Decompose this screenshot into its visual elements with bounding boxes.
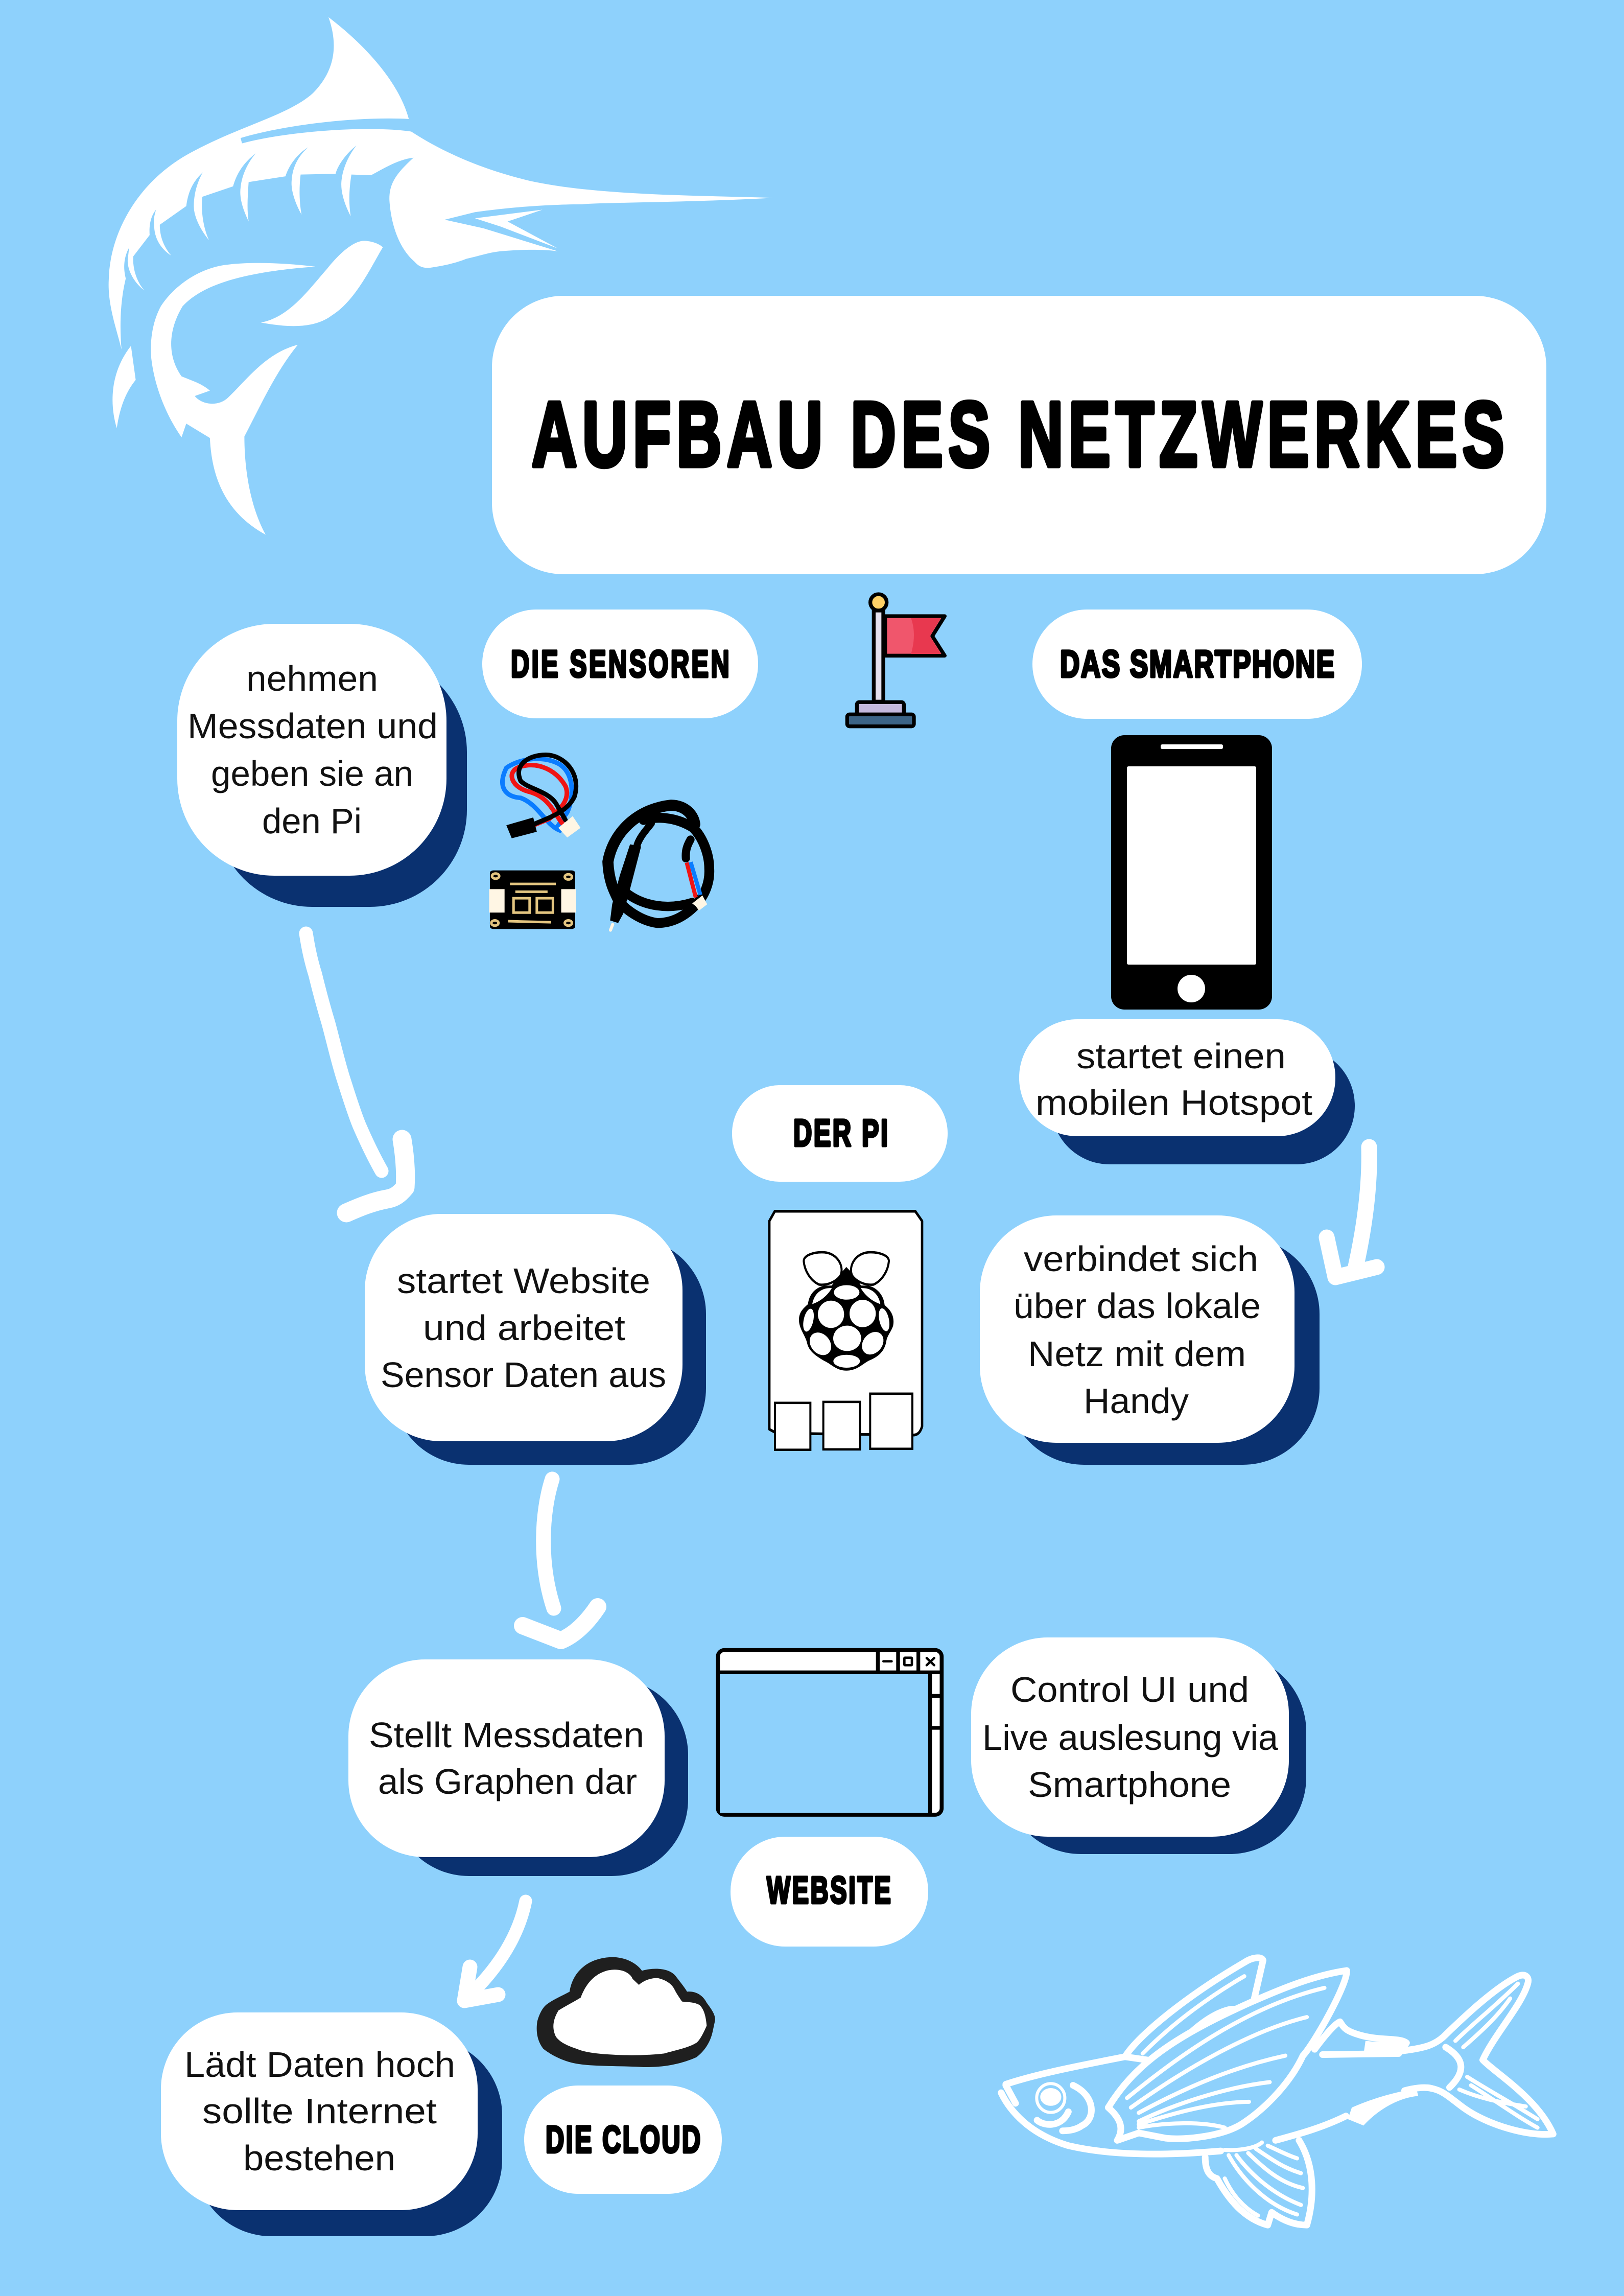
text: sensor description: geben sie an xyxy=(211,754,413,793)
text: graphs description: Stellt Messdaten xyxy=(369,1715,644,1755)
text: network connection description: Netz mit dem xyxy=(1028,1334,1246,1374)
text: network connection description: Handy xyxy=(1084,1381,1189,1421)
icon: marlin fish xyxy=(109,17,773,535)
icon: raspberry logo xyxy=(799,1252,893,1371)
text: hotspot description: startet einen xyxy=(1076,1036,1286,1076)
text: sensor description: nehmen xyxy=(246,659,378,698)
text: upload description: sollte Internet xyxy=(202,2091,437,2131)
label: das Smartphone: DAS SMARTPHONE xyxy=(1060,643,1334,685)
label: die Sensoren: DIE SENSOREN xyxy=(511,644,729,685)
label: die Cloud xyxy=(524,2086,722,2194)
text: hotspot description: mobilen Hotspot xyxy=(1035,1083,1312,1122)
panel: Pi website description xyxy=(365,1214,706,1465)
label: die Sensoren xyxy=(482,610,758,718)
icon: website window xyxy=(718,1650,942,1815)
text: graphs description: als Graphen dar xyxy=(378,1762,637,1801)
panel: graphs description xyxy=(348,1659,688,1876)
panel: upload description xyxy=(161,2012,502,2236)
text: network connection description: über das lokale xyxy=(1014,1286,1261,1326)
arrow: sensors to Pi xyxy=(306,933,406,1213)
text: sensor description: Messdaten und xyxy=(187,706,438,746)
label: Website xyxy=(731,1837,928,1947)
text: Pi website description: und arbeitet xyxy=(423,1308,625,1348)
text: Pi website description: startet Website xyxy=(397,1261,650,1301)
icon: sensor board xyxy=(489,871,576,929)
arrow: Pi to graphs xyxy=(523,1479,598,1641)
text: upload description: bestehen xyxy=(243,2138,395,2178)
text: Pi website description: Sensor Daten aus xyxy=(381,1355,666,1395)
text: network connection description: verbindet sich xyxy=(1024,1239,1258,1279)
label: der Pi: DER PI xyxy=(793,1113,888,1154)
icon: cloud xyxy=(537,1957,715,2067)
text: control UI description: Control UI und xyxy=(1010,1670,1249,1709)
label: das Smartphone xyxy=(1032,610,1362,719)
icon: flying fish xyxy=(1001,1958,1553,2225)
panel: control UI description xyxy=(971,1637,1306,1854)
text: control UI description: Smartphone xyxy=(1028,1765,1231,1805)
label: die Cloud: DIE CLOUD xyxy=(546,2119,700,2161)
panel: network connection description xyxy=(980,1215,1320,1465)
icon: sensor wire xyxy=(503,755,580,838)
heading: Aufbau des Netzwerkes: AUFBAU DES NETZWERKES xyxy=(532,383,1504,486)
text: sensor description: den Pi xyxy=(262,801,362,841)
icon: smartphone xyxy=(1111,735,1272,1010)
icon: flag xyxy=(847,594,945,727)
panel: sensor description xyxy=(177,624,467,907)
icon: Raspberry Pi board xyxy=(769,1211,922,1450)
arrow: graphs to cloud upload xyxy=(464,1901,526,2001)
label: der Pi xyxy=(732,1085,948,1182)
icon: cable probe xyxy=(608,805,710,930)
panel: title xyxy=(492,296,1546,574)
arrow: smartphone to Pi network xyxy=(1327,1147,1377,1277)
label: Website: WEBSITE xyxy=(767,1869,891,1912)
text: upload description: Lädt Daten hoch xyxy=(184,2045,455,2084)
panel: hotspot description xyxy=(1019,1019,1355,1164)
text: control UI description: Live auslesung via xyxy=(982,1718,1278,1758)
icon: sensors xyxy=(489,755,710,930)
